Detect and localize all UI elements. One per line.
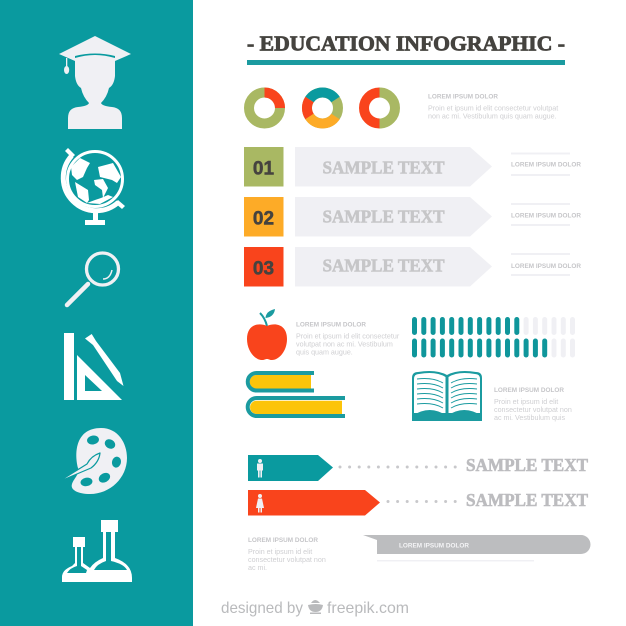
apple text — [296, 322, 400, 356]
step 01: 01 — [253, 158, 274, 180]
step 01: LOREM IPSUM DOLOR — [511, 162, 581, 168]
grey callout banner — [363, 535, 590, 562]
teal arrow bar with male icon — [248, 455, 333, 481]
apple text: volutpat non ac mi. Vestibulum — [296, 340, 393, 348]
donut legend text: non ac mi. Vestibulum quis quam augue. — [428, 112, 557, 120]
bottom text block: ac mi. — [248, 564, 267, 572]
icon: open book — [412, 371, 482, 421]
icon: apple — [247, 309, 287, 360]
bottom text block: LOREM IPSUM DOLOR — [248, 537, 318, 544]
book text: LOREM IPSUM DOLOR — [494, 387, 564, 394]
bottom text block: consectetur volutpat non — [248, 556, 326, 564]
donut legend text: Proin et ipsum id elit consectetur volutpat — [428, 104, 558, 112]
step 02: LOREM IPSUM DOLOR — [511, 212, 581, 220]
donut chart 3 — [364, 92, 395, 124]
donut legend text — [428, 94, 558, 120]
step 02: SAMPLE TEXT — [322, 207, 445, 227]
step 01 — [244, 147, 581, 186]
donut legend text: LOREM IPSUM DOLOR — [428, 94, 498, 100]
step 02 — [244, 197, 581, 236]
step 03: 03 — [253, 258, 274, 280]
step 03: SAMPLE TEXT — [322, 256, 445, 276]
heading: sample text 1: SAMPLE TEXT — [466, 455, 588, 475]
icon: magnifier — [67, 253, 118, 305]
donut chart 1 — [249, 92, 280, 124]
book text: consectetur volutpat non — [494, 406, 572, 414]
footer credit: freepik.com — [327, 600, 409, 617]
icon: flasks — [62, 520, 132, 582]
icon: palette — [58, 428, 127, 494]
teal dotted leader — [338, 466, 457, 468]
footer credit — [221, 600, 409, 617]
bottom text block — [248, 537, 326, 572]
progress bars — [412, 317, 575, 358]
bottom text block: Proin et ipsum id elit — [248, 548, 312, 556]
red dotted leader — [386, 500, 457, 503]
book text — [494, 387, 572, 422]
step 03: LOREM IPSUM DOLOR — [511, 263, 581, 270]
apple text: LOREM IPSUM DOLOR — [296, 322, 366, 328]
icon: books — [248, 373, 345, 416]
step 03 — [244, 247, 581, 286]
red arrow bar with female icon — [248, 490, 380, 516]
apple text: quis quam augue. — [296, 348, 353, 356]
icon: graduate — [59, 36, 131, 129]
donut chart 2 — [307, 92, 338, 124]
book text: ac mi. Vestibulum quis — [494, 414, 565, 422]
icon: globe — [63, 148, 125, 225]
title: - EDUCATION INFOGRAPHIC - — [247, 32, 565, 56]
grey callout banner: LOREM IPSUM DOLOR — [399, 542, 469, 550]
book text: Proin et ipsum id elit — [494, 398, 558, 406]
icon: ruler and set square — [64, 333, 124, 400]
step 01: SAMPLE TEXT — [322, 157, 445, 177]
title — [247, 32, 565, 65]
footer credit: designed by — [221, 600, 303, 617]
sidebar panel — [0, 0, 193, 626]
step 02: 02 — [253, 208, 274, 230]
heading: sample text 2: SAMPLE TEXT — [466, 490, 588, 510]
apple text: Proin et ipsum id elit consectetur — [296, 332, 400, 340]
